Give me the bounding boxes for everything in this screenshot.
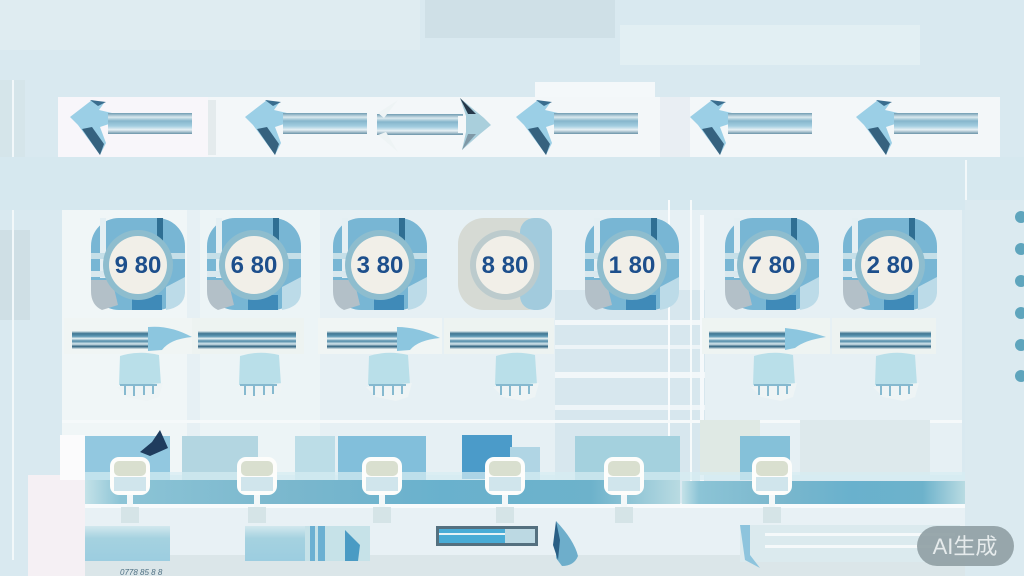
centre progress bar bbox=[436, 526, 538, 546]
note icons row bbox=[117, 353, 919, 401]
module 1 bbox=[110, 457, 150, 523]
arrow 1 bbox=[70, 100, 192, 155]
note icon 2 bbox=[237, 353, 283, 401]
strip 1 with arrow bbox=[72, 327, 192, 351]
badge 7: 2 80 bbox=[867, 252, 913, 279]
badge 4: 8 80 bbox=[482, 252, 528, 279]
badge 2: 6 80 bbox=[231, 252, 277, 279]
badge 5 bbox=[585, 218, 679, 310]
lower panels bbox=[85, 525, 960, 568]
strip 2 bbox=[198, 331, 296, 349]
badge 4 bbox=[458, 218, 552, 310]
badge 1 bbox=[91, 218, 185, 310]
arrow 3: right-pointing bbox=[377, 98, 491, 152]
side dots bbox=[1015, 211, 1024, 382]
badge 6 bbox=[725, 218, 819, 310]
AI badge: AI生成 bbox=[933, 534, 997, 559]
connector strips row bbox=[64, 318, 936, 354]
note icon 5 bbox=[751, 353, 797, 401]
AI badge bbox=[917, 526, 1014, 566]
badge 2 bbox=[207, 218, 301, 310]
module 3 bbox=[362, 457, 402, 523]
module 5 bbox=[604, 457, 644, 523]
strip 6 bbox=[840, 331, 931, 349]
badge 6: 7 80 bbox=[749, 252, 795, 279]
arrow 4 bbox=[516, 100, 638, 155]
badge 1: 9 80 bbox=[115, 252, 161, 279]
arrow 5 bbox=[690, 100, 812, 155]
strip 3 with arrow bbox=[327, 327, 440, 351]
strip 5 with arrow bbox=[709, 328, 826, 350]
note icon 3 bbox=[366, 353, 412, 401]
badge 7 bbox=[843, 218, 937, 310]
note icon 6 bbox=[873, 353, 919, 401]
badge 3 bbox=[333, 218, 427, 310]
note icon 1 bbox=[117, 353, 163, 401]
arrow 6 bbox=[856, 100, 978, 155]
panel: top arrow strip bbox=[58, 97, 1000, 157]
strip 4 bbox=[450, 331, 548, 349]
module 6 bbox=[752, 457, 792, 523]
panel: blue process band bbox=[85, 430, 965, 523]
icon: drop bbox=[553, 521, 578, 566]
note icon 4 bbox=[493, 353, 539, 401]
module 4 bbox=[485, 457, 525, 523]
module 2 bbox=[237, 457, 277, 523]
arrow 2 bbox=[245, 100, 367, 155]
badge 3: 3 80 bbox=[357, 252, 403, 279]
badge 5: 1 80 bbox=[609, 252, 655, 279]
